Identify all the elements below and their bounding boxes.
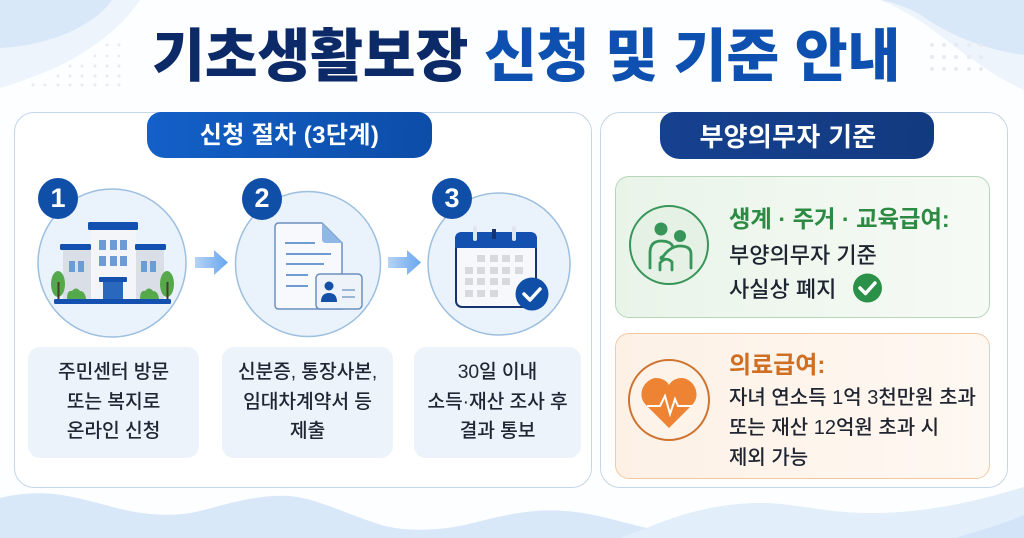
icon: heart bbox=[628, 359, 710, 441]
heading: application procedure: 신청 절차 (3단계) bbox=[200, 122, 379, 149]
text: medical benefits body: 자녀 연소득 1억 3천만원 초과 bbox=[729, 387, 976, 409]
icon: step 3 badge bbox=[432, 178, 472, 219]
heading: green benefits: 생계 · 주거 · 교육급여: bbox=[729, 206, 950, 232]
panel: application procedure bbox=[14, 112, 592, 488]
heading: dependent obligation criteria: 부양의무자 기준 bbox=[699, 122, 877, 152]
text: step 3 description: 30일 이내 bbox=[458, 362, 537, 383]
panel: dependent obligation criteria bbox=[600, 112, 1008, 488]
icon: step 3 badge: 3 bbox=[444, 183, 460, 213]
text: step 1 description: 또는 복지로 bbox=[67, 392, 160, 412]
text: step 2 description: 임대차계약서 등 bbox=[243, 392, 372, 412]
text: step 1 description bbox=[28, 347, 199, 458]
text: medical benefits body: 제외 가능 bbox=[729, 447, 808, 469]
card: green benefits bbox=[615, 176, 990, 318]
text: step 2 description bbox=[222, 347, 393, 458]
arrow: step 1 to 2 bbox=[195, 250, 228, 275]
icon: family bbox=[629, 205, 709, 285]
arrow: step 2 to 3 bbox=[388, 250, 421, 275]
card: medical benefits bbox=[615, 333, 990, 479]
text: step 2 description: 제출 bbox=[290, 421, 325, 442]
icon: green check bbox=[853, 274, 882, 302]
text: medical benefits body bbox=[729, 387, 976, 469]
text: step 3 description bbox=[414, 347, 581, 458]
text: step 3 description: 결과 통보 bbox=[460, 421, 535, 442]
text: medical benefits body: 또는 재산 12억원 초과 시 bbox=[729, 417, 939, 439]
text: step 1 description: 주민센터 방문 bbox=[58, 362, 169, 383]
icon: step 3 calendar bbox=[427, 192, 571, 336]
heading: dependent obligation criteria bbox=[660, 112, 934, 159]
text: green benefits body: 사실상 폐지 bbox=[729, 277, 836, 302]
text: step 3 description: 소득·재산 조사 후 bbox=[427, 392, 568, 412]
text: green benefits body: 부양의무자 기준 bbox=[729, 243, 877, 268]
heading: medical benefits: 의료급여: bbox=[729, 352, 825, 379]
icon: step 1 building bbox=[37, 188, 187, 338]
text: green benefits body bbox=[729, 243, 877, 302]
icon: step 2 badge bbox=[242, 178, 282, 220]
icon: step 2 document bbox=[234, 190, 382, 338]
text: step 1 description: 온라인 신청 bbox=[67, 421, 160, 442]
title: 기초생활보장 신청 및 기준 안내 bbox=[152, 25, 900, 89]
icon: step 2 badge: 2 bbox=[254, 183, 270, 213]
heading: application procedure bbox=[147, 112, 432, 158]
text: step 2 description: 신분증, 통장사본, bbox=[238, 362, 377, 383]
icon: step 1 badge: 1 bbox=[50, 183, 66, 213]
icon: step 1 badge bbox=[38, 178, 78, 219]
